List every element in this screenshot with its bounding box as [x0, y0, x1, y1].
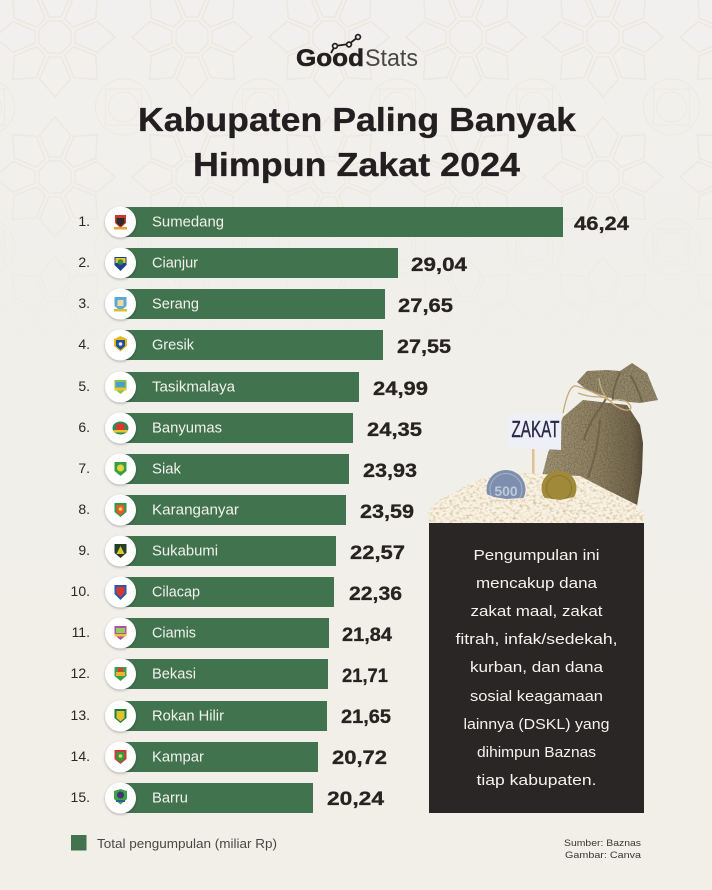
row 6: Banyumas: [78, 412, 423, 444]
row 14: Kampar: [71, 742, 387, 772]
row 15: Barru: Barru: [152, 790, 188, 806]
callout: explanation box: tiap kabupaten.: [476, 772, 596, 789]
row 12: Bekasi: 21,71: [342, 666, 388, 687]
legend: Total pengumpulan (miliar Rp): [97, 837, 277, 851]
callout: explanation box: kurban, dan dana: [470, 659, 604, 676]
row 2: Cianjur: [78, 248, 468, 278]
row 5: Tasikmalaya: 5.: [78, 378, 90, 394]
row 11: Ciamis: [72, 618, 392, 648]
row 8: Karanganyar: Karanganyar: [152, 502, 239, 518]
callout: explanation box: mencakup dana: [476, 575, 598, 592]
title: Kabupaten Paling Banyak: [138, 101, 577, 138]
row 4: Gresik: [78, 330, 451, 360]
row 3: Serang: 27,65: [398, 296, 454, 317]
row 13: Rokan Hilir: 13.: [71, 707, 90, 723]
row 7: Siak: 23,93: [363, 461, 417, 482]
row 2: Cianjur: Cianjur: [152, 256, 198, 272]
icon: zakat sign: [508, 414, 562, 496]
row 10: Cilacap: 22,36: [349, 584, 402, 605]
icon: silver coin: 500: [494, 483, 518, 499]
row 5: Tasikmalaya: 24,99: [373, 379, 428, 400]
title: Himpun Zakat 2024: [193, 146, 521, 183]
row 9: Sukabumi: 9.: [78, 542, 90, 558]
row 8: Karanganyar: 8.: [78, 501, 90, 517]
row 1: Sumedang: Sumedang: [152, 214, 224, 230]
row 14: Kampar: Kampar: [152, 750, 204, 766]
row 15: Barru: 15.: [71, 789, 90, 805]
row 4: Gresik: 27,55: [397, 337, 451, 358]
bar chart: total collection per regency: [71, 206, 630, 814]
row 9: Sukabumi: 22,57: [350, 543, 405, 564]
row 4: Gresik: Gresik: [152, 338, 195, 354]
row 9: Sukabumi: Sukabumi: [152, 544, 218, 560]
row 10: Cilacap: [71, 576, 402, 608]
row 3: Serang: Serang: [152, 296, 199, 312]
row 11: Ciamis: Ciamis: [152, 626, 196, 642]
row 13: Rokan Hilir: [71, 700, 391, 732]
source credits: Sumber: Baznas: [564, 838, 641, 849]
callout: explanation box: zakat maal, zakat: [470, 603, 603, 620]
source credits: Gambar: Canva: [565, 850, 642, 861]
row 3: Serang: 3.: [78, 295, 90, 311]
source credits: [564, 838, 642, 861]
callout: explanation box: dihimpun Baznas: [477, 744, 596, 761]
title: [138, 101, 577, 183]
row 6: Banyumas: 24,35: [367, 420, 423, 441]
callout: explanation box: lainnya (DSKL) yang: [464, 716, 610, 733]
row 10: Cilacap: Cilacap: [152, 584, 200, 600]
row 14: Kampar: 20,72: [332, 748, 387, 769]
callout: explanation box: [429, 523, 644, 813]
icon: silver coin: [486, 470, 526, 509]
row 4: Gresik: 4.: [78, 336, 90, 352]
icon: rice pile back: [428, 473, 644, 523]
row 10: Cilacap: 10.: [71, 583, 90, 599]
row 3: Serang: [78, 288, 454, 320]
row 8: Karanganyar: 23,59: [360, 502, 414, 523]
row 6: Banyumas: 6.: [78, 419, 90, 435]
row 14: Kampar: 14.: [71, 748, 90, 764]
row 11: Ciamis: 11.: [72, 624, 90, 640]
row 12: Bekasi: Bekasi: [152, 666, 196, 682]
row 7: Siak: Siak: [152, 462, 182, 478]
icon: gold coin: [542, 470, 576, 506]
callout: explanation box: Pengumpulan ini: [474, 547, 600, 564]
row 2: Cianjur: 2.: [78, 254, 90, 270]
row 6: Banyumas: Banyumas: [152, 420, 222, 436]
row 13: Rokan Hilir: 21,65: [341, 707, 391, 728]
row 1: Sumedang: 1.: [78, 213, 90, 229]
row 15: Barru: 20,24: [327, 789, 385, 810]
callout: explanation box: fitrah, infak/sedekah,: [456, 631, 618, 648]
logo: GoodStats: [296, 35, 418, 72]
row 1: Sumedang: 46,24: [574, 214, 630, 235]
illustration: zakat sack, sign, coins and rice: [428, 363, 658, 523]
callout: explanation box: sosial keagamaan: [470, 688, 603, 705]
row 8: Karanganyar: [78, 494, 414, 526]
row 9: Sukabumi: [78, 536, 405, 566]
row 15: Barru: [71, 782, 385, 814]
logo: GoodStats: Stats: [365, 45, 418, 72]
row 5: Tasikmalaya: Tasikmalaya: [152, 380, 236, 396]
row 7: Siak: [78, 454, 417, 484]
row 11: Ciamis: 21,84: [342, 625, 392, 646]
row 2: Cianjur: 29,04: [411, 255, 468, 276]
icon: rice pile front: [428, 490, 644, 523]
logo: GoodStats: Good: [296, 45, 364, 72]
icon: burlap sack: [542, 363, 658, 506]
row 12: Bekasi: 12.: [71, 665, 90, 681]
row 5: Tasikmalaya: [78, 372, 428, 402]
row 13: Rokan Hilir: Rokan Hilir: [152, 708, 224, 724]
row 7: Siak: 7.: [78, 460, 90, 476]
row 1: Sumedang: [78, 206, 630, 238]
icon: zakat sign: ZAKAT: [512, 416, 560, 442]
row 12: Bekasi: [71, 658, 388, 690]
